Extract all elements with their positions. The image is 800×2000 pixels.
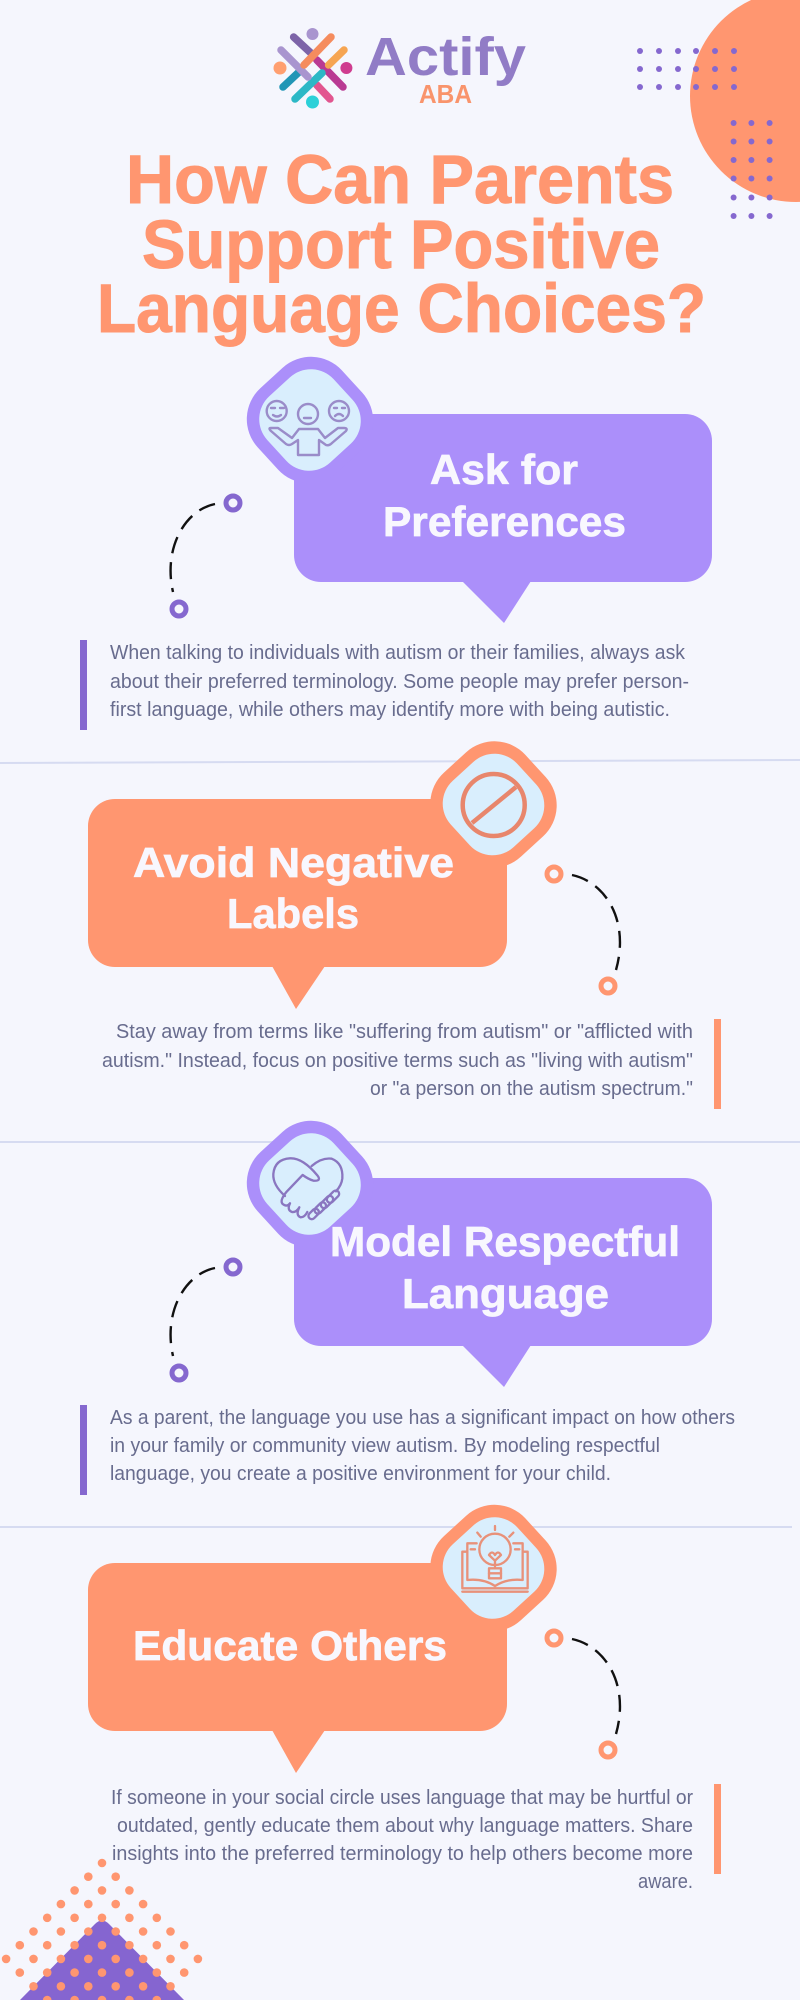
- logo: Actify ABA: [274, 27, 526, 109]
- icon: person with faces: [246, 356, 374, 484]
- heading: Educate Others: [133, 1622, 447, 1669]
- logo mark: [274, 28, 352, 108]
- connector arrow: [547, 867, 620, 993]
- body text: When talking to individuals with autism or their families, always ask: [110, 642, 686, 664]
- panel: avoid negative labels: [88, 724, 721, 1109]
- body text: [102, 1021, 693, 1100]
- card: [229, 1103, 712, 1387]
- icon: handshake heart: [246, 1120, 374, 1248]
- heading: [330, 1218, 680, 1317]
- body text: As a parent, the language you use has a significant impact on how others: [110, 1407, 735, 1429]
- decoration: purple dot grid vertical: [731, 120, 773, 219]
- body text: insights into the preferred terminology to help others become more: [112, 1843, 693, 1865]
- card: [88, 1487, 574, 1773]
- connector arrow: [547, 1631, 620, 1757]
- connector arrow: [171, 496, 240, 616]
- heading: Labels: [227, 890, 359, 937]
- logo wordmark: Actify: [365, 27, 526, 87]
- connector arrow: [171, 1260, 240, 1380]
- icon: prohibition sign: [430, 741, 557, 868]
- heading: [383, 446, 626, 545]
- body text: or "a person on the autism spectrum.": [370, 1078, 693, 1100]
- panel: ask for preferences: [80, 339, 712, 730]
- body text: outdated, gently educate them about why language matters. Share: [117, 1815, 693, 1837]
- panel: educate others: [88, 1487, 721, 1893]
- body text: in your family or community view autism. By modeling respectful: [110, 1435, 660, 1457]
- panel: model respectful language: [80, 1103, 735, 1495]
- divider lines: [0, 760, 800, 1527]
- body text: [111, 1787, 693, 1893]
- heading: Ask for: [430, 446, 578, 493]
- body text: [110, 1407, 735, 1485]
- accent bar: [80, 640, 87, 730]
- card: [88, 724, 574, 1009]
- decoration: purple triangle bottom left: [20, 1920, 184, 2000]
- title: [97, 141, 706, 347]
- heading: [133, 839, 454, 937]
- body text: first language, while others may identify more with being autistic.: [110, 699, 670, 721]
- body text: Stay away from terms like "suffering from autism" or "afflicted with: [116, 1021, 693, 1043]
- body text: If someone in your social circle uses language that may be hurtful or: [111, 1787, 693, 1809]
- heading: Avoid Negative: [133, 839, 454, 886]
- title: Language Choices?: [97, 270, 706, 347]
- card: [229, 339, 712, 623]
- body text: [110, 642, 689, 721]
- body text: about their preferred terminology. Some people may prefer person-: [110, 671, 689, 693]
- logo subtitle: ABA: [419, 79, 472, 109]
- decoration: orange dot diamond: [2, 1859, 202, 2000]
- body text: language, you create a positive environment for your child.: [110, 1463, 611, 1485]
- decoration: orange circle top right: [690, 0, 800, 202]
- accent bar: [80, 1405, 87, 1495]
- icon: book and light bulb: [430, 1504, 557, 1632]
- accent bar: [714, 1784, 721, 1874]
- heading: Language: [402, 1270, 609, 1317]
- title: How Can Parents: [126, 141, 674, 218]
- title: Support Positive: [142, 206, 660, 283]
- body text: autism." Instead, focus on positive terms such as "living with autism": [102, 1050, 693, 1072]
- body text: aware.: [638, 1871, 693, 1893]
- decoration: purple dot grid horizontal: [637, 48, 737, 90]
- heading: Preferences: [383, 498, 626, 545]
- heading: Model Respectful: [330, 1218, 680, 1265]
- accent bar: [714, 1019, 721, 1109]
